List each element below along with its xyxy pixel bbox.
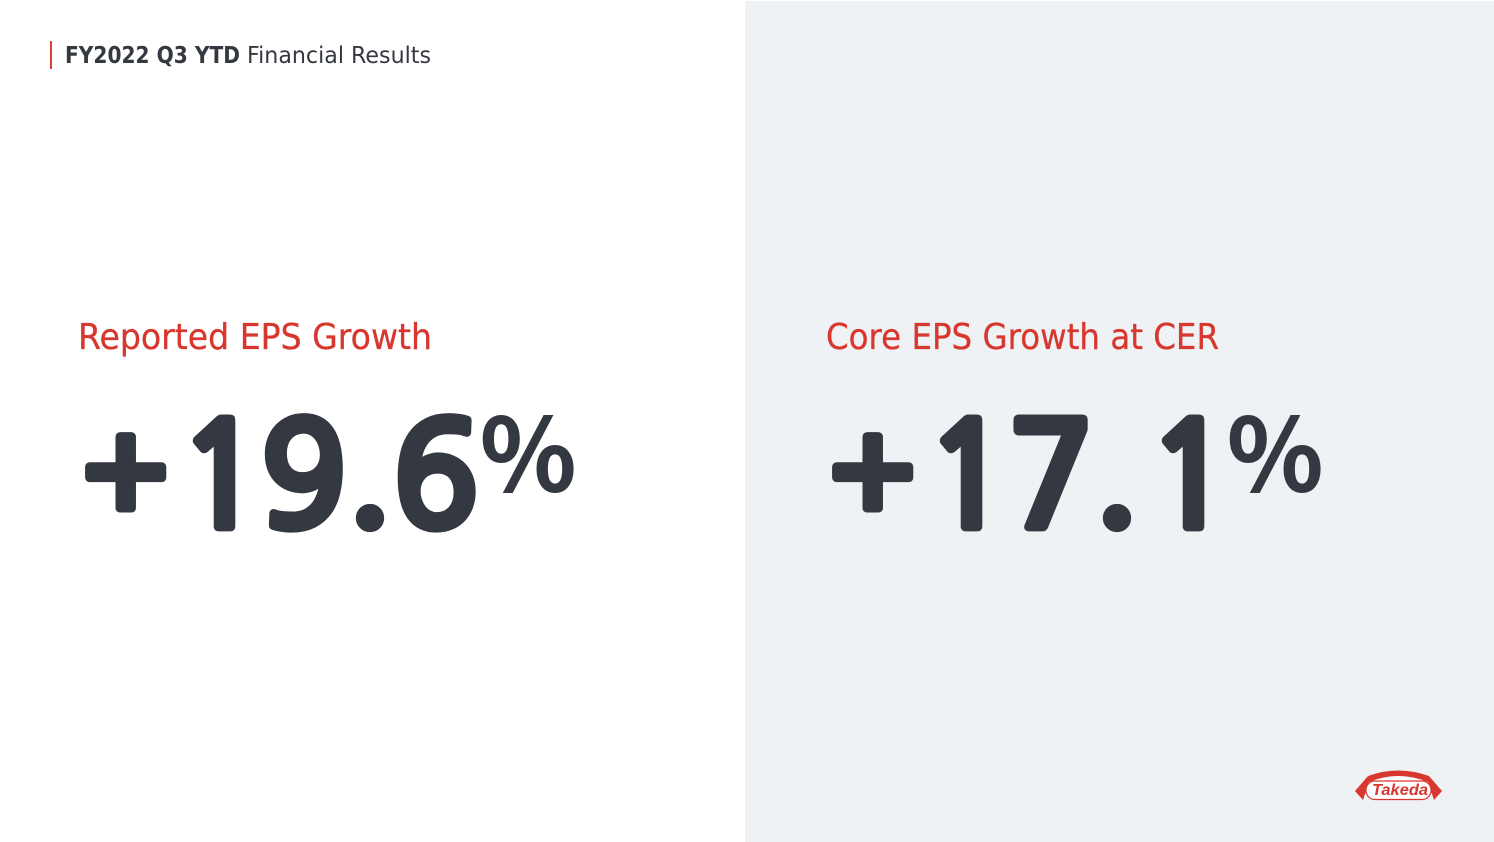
panel: reported EPS growth: 19.6 bbox=[177, 397, 480, 550]
panel: reported EPS growth: + bbox=[81, 410, 170, 544]
header: FY2022 Q3 YTD bbox=[65, 43, 240, 69]
panel: reported EPS growth: % bbox=[480, 375, 576, 520]
panel: core EPS growth: Core EPS Growth at CER bbox=[826, 317, 1219, 358]
panel: reported EPS growth: Reported EPS Growth bbox=[78, 317, 432, 358]
icon: Takeda logo bbox=[1355, 770, 1442, 800]
panel: core EPS growth: % bbox=[1227, 375, 1323, 520]
panel: right background bbox=[745, 1, 1494, 842]
panel: core EPS growth bbox=[826, 317, 1323, 550]
panel: core EPS growth: + bbox=[828, 410, 917, 544]
panel: reported EPS growth bbox=[78, 317, 576, 550]
panel: core EPS growth: 17.1 bbox=[924, 397, 1234, 550]
header bbox=[50, 41, 431, 69]
header: Financial Results bbox=[247, 43, 431, 69]
icon: Takeda logo: Takeda bbox=[1372, 782, 1428, 799]
